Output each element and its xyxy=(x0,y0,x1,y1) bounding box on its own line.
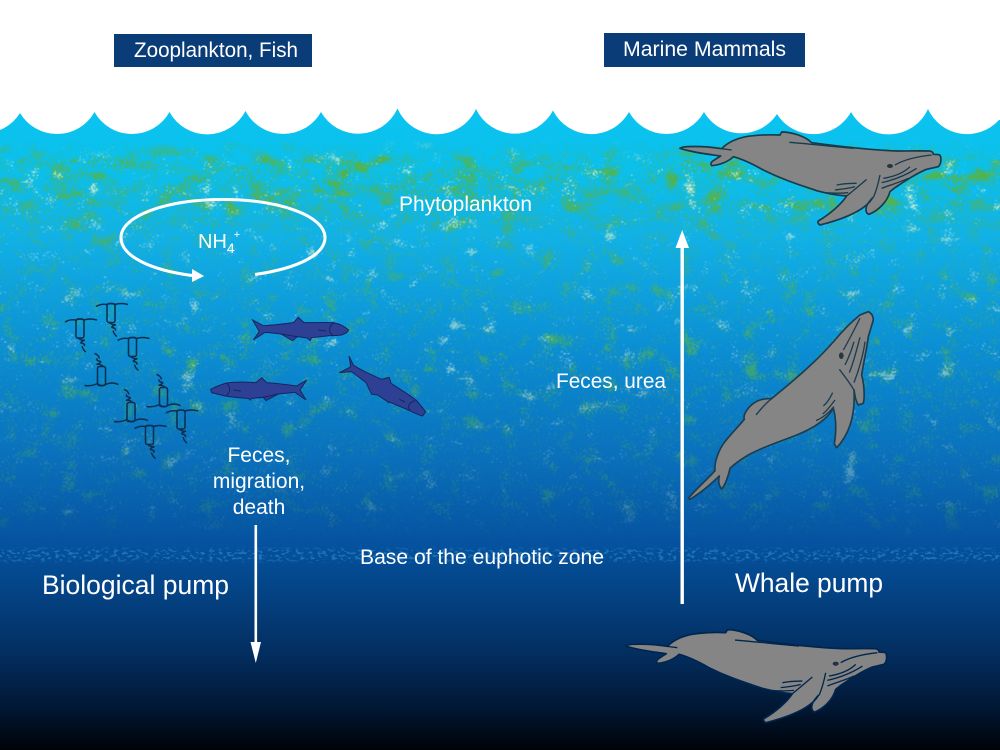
copepod 4 xyxy=(84,354,118,386)
copepod 3 xyxy=(118,338,150,370)
fish: lower left xyxy=(211,378,307,401)
copepod 6 xyxy=(114,390,148,422)
label: NH4+: NH xyxy=(198,231,227,253)
copepod 2 xyxy=(96,304,128,336)
wave surface xyxy=(0,0,1000,134)
whale: deep xyxy=(626,630,887,723)
copepods xyxy=(65,304,198,458)
arrow: downward export xyxy=(250,525,261,663)
copepod 5 xyxy=(146,374,180,407)
label: NH4+: 4 xyxy=(227,240,235,256)
fish: top xyxy=(253,317,349,341)
fish: lower right xyxy=(339,356,426,416)
copepod 7 xyxy=(166,410,198,443)
arrow: upward nutrient transport xyxy=(676,230,689,604)
heading: Marine Mammals: Marine Mammals xyxy=(623,38,786,61)
ammonium cycle arrow xyxy=(121,200,325,282)
label: Base of the euphotic zone: Base of the euphotic zone xyxy=(360,546,604,569)
heading: Zooplankton, Fish: Zooplankton, Fish xyxy=(134,39,298,62)
label: NH4+: + xyxy=(234,229,240,241)
label: Biological pump: Biological pump xyxy=(42,570,229,600)
label: Feces, migration, death: Feces, xyxy=(227,444,291,467)
label: Whale pump: Whale pump xyxy=(735,568,883,598)
phytoplankton texture xyxy=(0,130,1000,550)
label: Feces, migration, death: death xyxy=(233,496,285,519)
whale: surface xyxy=(680,132,941,225)
base of euphotic zone band xyxy=(0,548,1000,563)
heading: Marine Mammals xyxy=(604,33,805,67)
whale: mid-water xyxy=(688,312,873,499)
label: Phytoplankton: Phytoplankton xyxy=(399,193,532,216)
heading: Zooplankton, Fish xyxy=(114,34,312,67)
copepod 1 xyxy=(65,319,97,352)
label: Feces, urea: Feces, urea xyxy=(556,370,666,393)
label: Feces, migration, death: migration, xyxy=(213,470,305,493)
copepod 8 xyxy=(134,426,166,458)
